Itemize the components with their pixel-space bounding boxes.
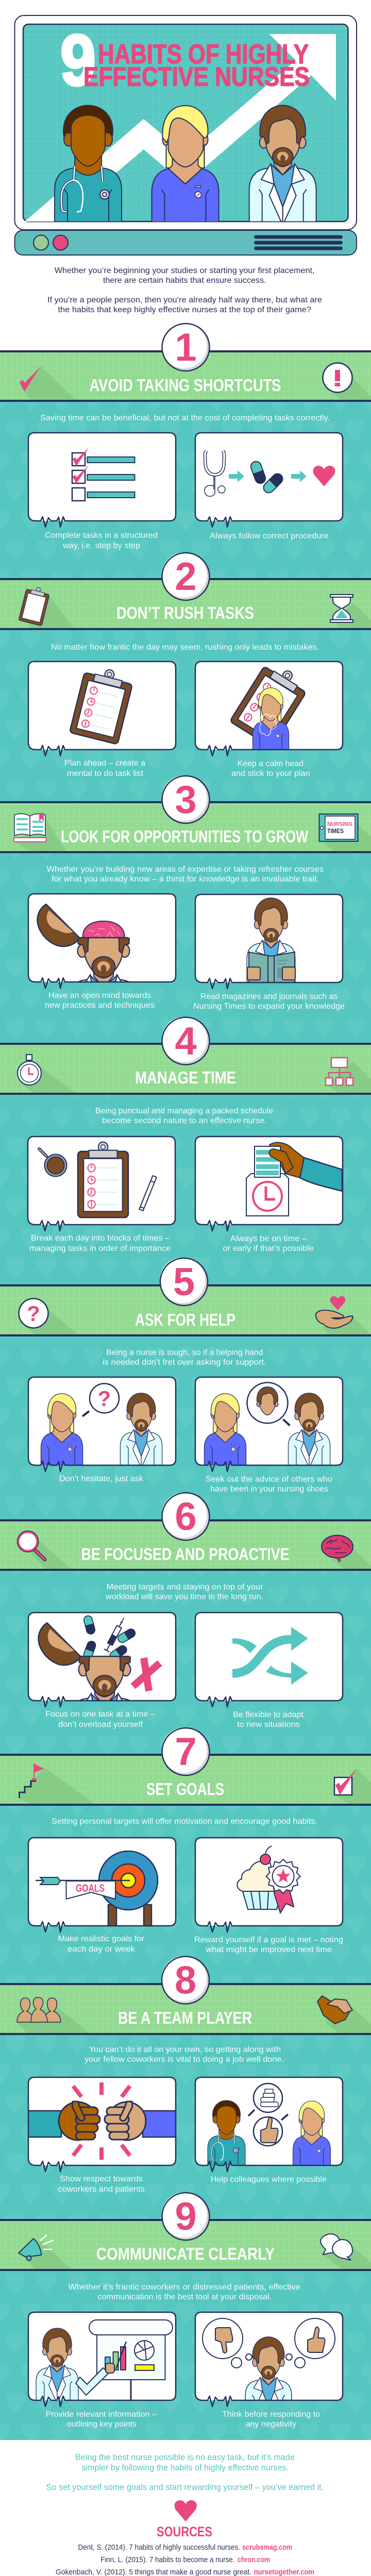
heading: DON’T RUSH TASKS xyxy=(116,603,254,622)
section 6: be focused and proactive xyxy=(0,1492,371,1758)
number badge 2: 2 xyxy=(175,555,197,599)
section 7: set goals xyxy=(0,1727,371,1984)
intro text xyxy=(47,266,322,314)
card: seek advice xyxy=(195,1377,343,1471)
heading: AVOID TAKING SHORTCUTS xyxy=(90,376,281,395)
number badge 8: 8 xyxy=(175,1959,196,2002)
intro: become second nature to an effective nurse. xyxy=(102,1116,267,1125)
body panel xyxy=(0,629,371,802)
number badge 6 xyxy=(162,1492,209,1540)
caption: Complete tasks in a structured xyxy=(45,531,158,540)
caption: Seek out the advice of others who xyxy=(205,1475,332,1484)
icon: org chart xyxy=(326,1058,353,1085)
sources list: chron.com xyxy=(238,2555,270,2564)
impact rays xyxy=(73,2082,130,2160)
caption: way, i.e. step by step xyxy=(62,541,140,550)
heading band xyxy=(0,351,371,401)
arm sleeve xyxy=(300,1158,342,1191)
caption: any negativity xyxy=(246,2420,296,2429)
number badge 3 xyxy=(162,775,209,823)
caption: Help colleagues where possible xyxy=(211,2175,327,2184)
figures xyxy=(204,1393,330,1466)
caption: Keep a calm head xyxy=(237,759,303,768)
heading band xyxy=(0,1285,371,1335)
icon: thumbs up xyxy=(308,2327,325,2352)
caption: coworkers and patients xyxy=(58,2185,145,2194)
intro text: If you’re a people person, then you’re already half way there, but what are xyxy=(47,296,322,304)
icon: nursing times magazine: NURSING xyxy=(327,821,352,827)
icon: brain xyxy=(322,1535,353,1562)
caption xyxy=(233,1710,304,1729)
icon: presentation board xyxy=(89,2320,173,2400)
number badge 7: 7 xyxy=(175,1730,197,1774)
caption: to new situations xyxy=(237,1720,300,1729)
icon: thumbs down xyxy=(215,2328,233,2353)
intro: Whether you’re building new areas of expertise or taking refresher courses xyxy=(46,865,324,874)
title: EFFECTIVE NURSES xyxy=(83,62,310,92)
caption xyxy=(45,531,158,550)
caption: or early if that’s possible xyxy=(223,1244,314,1253)
icon: time card box xyxy=(246,1174,289,1216)
number badge 7 xyxy=(162,1727,209,1775)
body panel xyxy=(0,1570,371,1755)
intro xyxy=(85,2045,284,2064)
monitor frame xyxy=(14,15,357,230)
intro xyxy=(95,1107,273,1125)
icon: speech bubbles xyxy=(321,2234,352,2260)
intro: workload will save you time in the long run. xyxy=(105,1592,263,1601)
number badge 8 xyxy=(161,1956,209,2004)
card: help colleagues xyxy=(195,2077,343,2172)
caption: Provide relevant information – xyxy=(46,2410,157,2419)
icon: handshake xyxy=(317,1996,352,2024)
caption xyxy=(205,1475,332,1494)
section 3: look for opportunities to grow xyxy=(0,775,371,1044)
intro text: the habits that keep highly effective nurses at the top of their game? xyxy=(58,306,311,314)
closing text: simpler by following the habits of highly effective nurses. xyxy=(81,2463,289,2472)
intro: Saving time can be beneficial, but not at the cost of completing tasks correctly. xyxy=(40,414,330,422)
sources list xyxy=(50,2543,320,2576)
number badge 5 xyxy=(160,1258,208,1306)
figures xyxy=(208,2100,330,2166)
number badge 4 xyxy=(162,1017,209,1064)
section 8: be a team player xyxy=(0,1956,371,2220)
intro: is needed don’t fret over asking for support. xyxy=(103,1358,266,1367)
card: on time xyxy=(195,1137,343,1231)
caption xyxy=(58,2175,145,2194)
card: presentation xyxy=(28,2312,176,2406)
caption: new practices and techniques xyxy=(45,1001,155,1010)
card: checklist xyxy=(28,433,176,527)
intro text: Whether you’re beginning your studies or starting your first placement, xyxy=(55,266,315,275)
intro: Meeting targets and staying on top of your xyxy=(107,1583,263,1591)
monitor screen xyxy=(23,24,348,222)
icon: cupcake and rosette xyxy=(237,1846,300,1913)
heading band xyxy=(0,1044,371,1094)
icon: target with arrow and banner: GOALS xyxy=(76,1883,105,1894)
icon: open book xyxy=(14,813,46,842)
caption: Focus on one task at a time – xyxy=(45,1710,155,1719)
card: blocks of time xyxy=(28,1137,175,1231)
caption xyxy=(64,759,145,778)
speech bubble: question: ? xyxy=(98,1386,111,1411)
section 4: manage time xyxy=(0,1017,371,1285)
icon: heart xyxy=(175,2500,197,2521)
card: one task xyxy=(28,1612,176,1707)
card: realistic goals xyxy=(28,1838,176,1932)
icon: ticked box xyxy=(334,1769,357,1795)
intro: You can’t do it all on your own, so getting along with xyxy=(89,2045,281,2054)
icon: question mark xyxy=(19,1298,48,1328)
section 9: communicate clearly xyxy=(0,2192,371,2440)
section 2: don't rush tasks xyxy=(0,552,371,802)
caption: outlining key points xyxy=(67,2420,137,2429)
caption: managing tasks in order of importance xyxy=(29,1244,171,1253)
body panel xyxy=(0,2034,371,2220)
header: monitor with nurses xyxy=(14,15,357,255)
icon: stopwatch xyxy=(18,1055,41,1085)
icon: exclamation xyxy=(323,363,352,393)
caption: and stick to your plan xyxy=(231,769,310,778)
figures xyxy=(41,1393,162,1466)
intro: Being a nurse is tough, so if a helping hand xyxy=(106,1348,263,1357)
arrow xyxy=(229,470,244,482)
intro: Whether it’s frantic coworkers or distressed patients, effective xyxy=(69,2283,300,2292)
title xyxy=(83,39,310,92)
caption xyxy=(222,2410,320,2429)
intro xyxy=(103,1348,266,1367)
icon: clipboard xyxy=(19,585,50,626)
body panel xyxy=(0,2270,371,2440)
icon: fist bump xyxy=(27,2102,177,2140)
card: respect xyxy=(27,2077,177,2172)
body panel xyxy=(0,852,371,1044)
title number 9: 9 xyxy=(60,20,96,100)
closing text xyxy=(46,2452,324,2492)
caption xyxy=(58,1935,145,1954)
figure: doctor thinking xyxy=(245,2336,292,2400)
heading: SET GOALS xyxy=(146,1780,224,1799)
figures: three health workers xyxy=(55,105,316,222)
icon: magnifying glass xyxy=(18,1531,45,1560)
icon: hourglass xyxy=(330,595,353,622)
icon: question mark: ? xyxy=(27,1301,40,1326)
section 5: ask for help xyxy=(0,1258,371,1520)
heading band xyxy=(0,1755,371,1805)
icon: doctor reading xyxy=(247,898,295,983)
number badge 5: 5 xyxy=(173,1260,195,1304)
number badge 1 xyxy=(162,323,209,371)
icon: checklist xyxy=(72,447,135,501)
heading: BE FOCUSED AND PROACTIVE xyxy=(81,1545,290,1564)
caption: Reward yourself if a goal is met – noting xyxy=(194,1936,343,1944)
figure: doctor presenting xyxy=(36,2328,114,2401)
card: calm head xyxy=(195,658,343,756)
caption xyxy=(231,759,310,778)
card: open mind xyxy=(28,893,176,989)
body panel xyxy=(0,1805,371,1984)
caption xyxy=(45,1710,155,1729)
caption xyxy=(45,991,155,1010)
number badge 1: 1 xyxy=(175,326,197,369)
caption xyxy=(193,992,345,1011)
heading band xyxy=(0,2220,371,2270)
caption: Think before responding to xyxy=(222,2410,320,2419)
icon: three people xyxy=(17,1997,61,2022)
heading band xyxy=(0,579,371,629)
closing text: Being the best nurse possible is no easy task, but it’s made xyxy=(75,2452,295,2462)
caption: Don’t hesitate, just ask xyxy=(59,1475,144,1483)
caption: Show respect towards xyxy=(60,2175,143,2183)
icon: pen xyxy=(139,1176,157,1211)
caption: Always follow correct procedure xyxy=(210,532,329,540)
caption xyxy=(223,1234,314,1253)
heading band xyxy=(0,1984,371,2034)
card: read journals xyxy=(195,894,343,989)
caption: Make realistic goals for xyxy=(58,1935,145,1943)
caption: Break each day into blocks of times – xyxy=(31,1234,170,1243)
icon: clipboard xyxy=(78,1142,128,1217)
caption: Nursing Times to expand your knowledge xyxy=(193,1002,345,1011)
intro xyxy=(105,1583,263,1601)
icon: heart in hand xyxy=(316,1296,352,1328)
number badge 9: 9 xyxy=(175,2195,197,2239)
monitor vents xyxy=(254,235,343,250)
sources list: scrubsmag.com xyxy=(242,2543,292,2552)
caption xyxy=(46,2410,157,2429)
intro: No matter how frantic the day may seem, rushing only leads to mistakes. xyxy=(51,643,319,652)
intro xyxy=(46,865,324,884)
speech bubble: question xyxy=(82,1384,119,1416)
intro: communication is the best tool at your disposal. xyxy=(98,2293,272,2301)
icon: shuffle arrows xyxy=(232,1627,308,1685)
caption: what might be improved next time xyxy=(205,1945,332,1954)
icon: thumbs up xyxy=(261,2117,278,2143)
heading: ASK FOR HELP xyxy=(135,1310,235,1329)
card: procedure xyxy=(195,433,343,527)
body panel xyxy=(0,1335,371,1520)
section 1: avoid taking shortcuts xyxy=(0,323,371,579)
caption xyxy=(194,1936,343,1954)
thought bubble: colleague xyxy=(247,1383,290,1426)
intro: your fellow coworkers is vital to doing a job well done. xyxy=(85,2055,284,2064)
title: HABITS OF HIGHLY xyxy=(98,39,309,70)
card: be flexible xyxy=(195,1613,343,1707)
icon: open head with pills and syringe xyxy=(38,1616,136,1700)
caption: have been in your nursing shoes xyxy=(210,1485,328,1494)
sources heading: SOURCES xyxy=(157,2524,212,2539)
icon: stairs and flag xyxy=(20,1764,44,1798)
intro: for what you already know – a thirst for knowledge is an invaluable trait. xyxy=(52,875,319,884)
caption: Always be on time – xyxy=(230,1234,307,1243)
monitor base xyxy=(14,230,357,255)
caption: Have an open mind towards xyxy=(48,991,151,1000)
caption: don’t overload yourself xyxy=(58,1720,143,1729)
arrow xyxy=(291,470,307,482)
icon: coffee cup xyxy=(39,1149,67,1177)
sources list: Dent, S. (2014). 7 habits of highly successful nurses. xyxy=(78,2543,240,2552)
icon: heart xyxy=(313,466,335,486)
caption: Plan ahead – create a xyxy=(64,759,145,768)
icon: tilted clipboard and nurse xyxy=(230,667,306,749)
icon: pills xyxy=(249,460,285,495)
icon: stethoscope xyxy=(204,450,226,496)
number badge 2 xyxy=(162,552,209,600)
icon: pink cross xyxy=(133,1658,160,1691)
intro text: there are certain habits that ensure success. xyxy=(103,276,266,285)
arrow: rising graph xyxy=(25,34,336,222)
sources list: Finn, L. (2015). 7 habits to become a nurse. xyxy=(100,2555,235,2564)
heading band xyxy=(0,802,371,852)
card: just ask xyxy=(28,1377,176,1471)
heading: BE A TEAM PLAYER xyxy=(118,2008,252,2027)
heading: COMMUNICATE CLEARLY xyxy=(96,2244,275,2263)
intro: Setting personal targets will offer motivation and encourage good habits. xyxy=(52,1817,317,1826)
number badge 9 xyxy=(162,2192,209,2240)
number badge 4: 4 xyxy=(175,1019,197,1063)
intro xyxy=(69,2283,300,2301)
icon: target with arrow and banner xyxy=(36,1851,158,1926)
body panel xyxy=(0,1094,371,1285)
thought bubbles xyxy=(203,2318,335,2368)
body panel xyxy=(0,401,371,579)
card: reward xyxy=(195,1838,343,1932)
icon: clipboard with clocks xyxy=(70,664,134,744)
caption: Read magazines and journals such as xyxy=(200,992,338,1001)
caption: mental to do task list xyxy=(67,769,144,778)
caption: Be flexible to adapt xyxy=(233,1710,304,1719)
closing text: So set yourself some goals and start rewarding yourself – you’ve earned it. xyxy=(46,2482,324,2492)
icon: nursing times magazine xyxy=(319,814,358,841)
icon: paper and hand xyxy=(255,1142,304,1178)
intro: Being punctual and managing a packed schedule xyxy=(95,1107,273,1115)
icon: open head with brain xyxy=(37,904,130,981)
speech bubbles xyxy=(248,2083,288,2146)
caption: each day or week xyxy=(68,1945,136,1954)
number badge 6: 6 xyxy=(175,1495,197,1538)
heading band xyxy=(0,1520,371,1570)
icon: nursing times magazine: TIMES xyxy=(327,827,344,835)
icon: check mark xyxy=(20,366,41,392)
caption xyxy=(29,1234,171,1253)
number badge 3: 3 xyxy=(175,778,197,822)
heading: MANAGE TIME xyxy=(135,1068,236,1087)
monitor buttons xyxy=(33,235,68,250)
card: think xyxy=(195,2312,343,2417)
icon: megaphone xyxy=(19,2235,54,2261)
card: plan ahead xyxy=(28,662,176,756)
